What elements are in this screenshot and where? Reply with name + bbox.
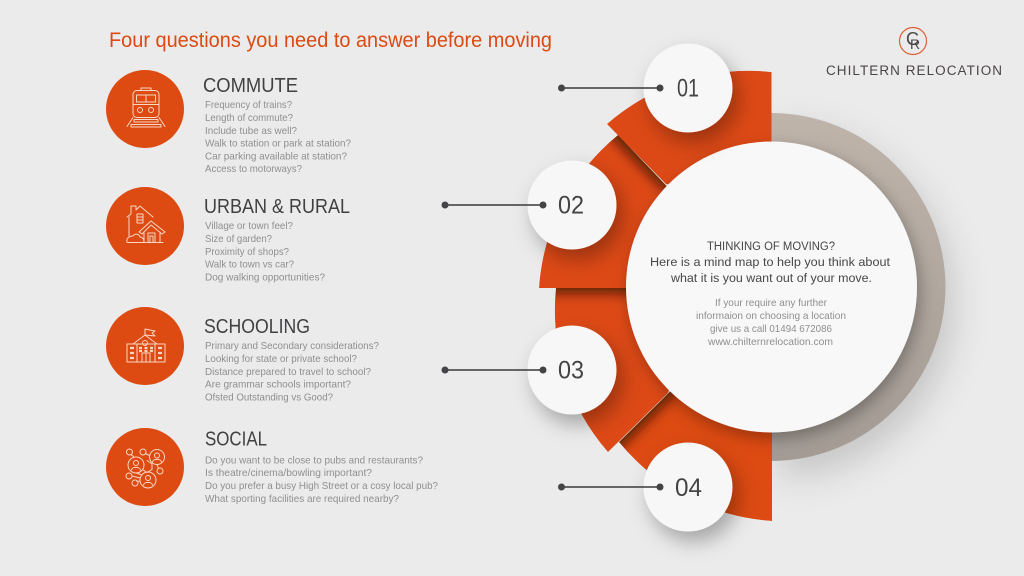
panel: schooling: Distance prepared to travel to school? <box>205 367 371 378</box>
orange segmented half ring <box>539 71 772 521</box>
icon: social network <box>126 449 164 488</box>
panel: social: Do you want to be close to pubs and restaurants? <box>205 456 423 466</box>
panel: commute: Access to motorways? <box>205 164 302 175</box>
segment 03 <box>554 288 679 452</box>
central text: give us a call 01494 672086 <box>710 324 832 335</box>
panel: commute: Car parking available at station? <box>205 152 347 162</box>
icon: school <box>127 329 165 362</box>
panel: social: Is theatre/cinema/bowling important? <box>205 468 372 479</box>
number badge 03 <box>528 326 616 414</box>
central text: If your require any further <box>715 298 828 309</box>
panel: schooling: Are grammar schools important? <box>205 380 351 390</box>
central text: informaion on choosing a location <box>696 311 846 322</box>
connector 02 <box>442 202 546 208</box>
panel: urban and rural: URBAN & RURAL <box>204 196 350 218</box>
central text: www.chilternrelocation.com <box>707 337 833 348</box>
central text <box>650 239 891 348</box>
panel: commute: COMMUTE <box>203 75 298 97</box>
panel: schooling: Primary and Secondary considerations? <box>205 341 379 352</box>
panel: urban and rural: Proximity of shops? <box>205 247 289 258</box>
panel: social: Do you prefer a busy High Street or a cosy local pub? <box>205 481 438 492</box>
panel: urban and rural: Village or town feel? <box>205 221 293 232</box>
panel: commute: Include tube as well? <box>205 126 297 137</box>
panel: social: SOCIAL <box>205 428 267 450</box>
number badge 02: 02 <box>558 192 584 220</box>
icon: house <box>127 206 165 242</box>
logo: Chiltern Relocation: R <box>910 36 920 52</box>
segment 02 <box>539 135 680 288</box>
central text: THINKING OF MOVING? <box>707 239 835 253</box>
panel: commute: Length of commute? <box>205 113 293 124</box>
panel: urban and rural <box>106 187 350 284</box>
number badge 02 <box>528 160 616 250</box>
panel: social <box>106 428 438 506</box>
logo: Chiltern Relocation <box>826 28 1002 78</box>
panel: social: What sporting facilities are required nearby? <box>205 494 399 505</box>
connector 01 <box>558 84 664 92</box>
segment 04 <box>619 392 772 521</box>
central text: what it is you want out of your move. <box>670 271 872 285</box>
segment 01 <box>607 71 772 200</box>
connector 03 <box>442 366 546 374</box>
panel: schooling <box>106 307 379 404</box>
icon: train <box>127 88 165 127</box>
panel: urban and rural: Dog walking opportunities? <box>205 272 325 284</box>
title: Four questions you need to answer before moving <box>109 29 552 52</box>
panel: urban and rural: Walk to town vs car? <box>205 260 294 270</box>
connector 04 <box>558 484 664 490</box>
panel: commute <box>106 70 351 175</box>
panel: commute: Frequency of trains? <box>205 100 292 111</box>
panel: schooling: SCHOOLING <box>204 316 310 338</box>
number badge 04 <box>644 442 732 532</box>
panel: schooling: Ofsted Outstanding vs Good? <box>205 392 333 404</box>
panel: urban and rural: Size of garden? <box>205 234 272 245</box>
central white circle <box>626 142 917 432</box>
central text: Here is a mind map to help you think about <box>650 255 891 269</box>
number badge 04: 04 <box>675 474 702 502</box>
panel: schooling: Looking for state or private school? <box>205 354 357 365</box>
taupe half circle <box>772 113 966 486</box>
panel: commute: Walk to station or park at station? <box>205 138 351 150</box>
logo: Chiltern Relocation: CHILTERN RELOCATION <box>826 63 1002 78</box>
logo: Chiltern Relocation: C <box>906 29 919 49</box>
number badge 01 <box>644 44 732 132</box>
number badge 03: 03 <box>558 356 584 384</box>
number badge 01: 01 <box>677 74 699 102</box>
